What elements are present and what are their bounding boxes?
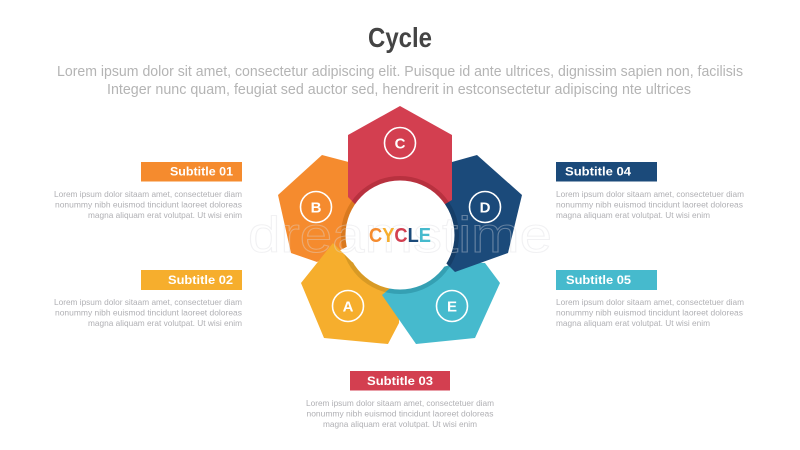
panel: subtitle 01: Lorem ipsum dolor sitaam amet, consectetuer diam: [54, 189, 242, 199]
subtitle text: [57, 63, 743, 98]
segment A: [301, 243, 400, 344]
panel: subtitle 01: Subtitle 01: [170, 166, 234, 178]
panel: subtitle 01: magna aliquam erat volutpat. Ut wisi enim: [88, 210, 242, 220]
cycle diagram: [278, 106, 522, 344]
panel: subtitle 05: Subtitle 05: [566, 275, 632, 287]
panel: subtitle 05: Lorem ipsum dolor sitaam amet, consectetuer diam: [556, 297, 744, 307]
panel: subtitle 01: [54, 162, 242, 220]
panel: subtitle 05: [556, 270, 744, 328]
panel: subtitle 05: nonummy nibh euismod tincidunt laoreet doloreas: [556, 308, 743, 318]
center circle: [346, 180, 454, 290]
segment A: A: [343, 298, 354, 316]
segment C: C: [395, 136, 406, 152]
panel: subtitle 04: nonummy nibh euismod tincidunt laoreet doloreas: [556, 200, 743, 210]
segment D: D: [480, 200, 491, 216]
panel: subtitle 03: Subtitle 03: [367, 376, 433, 388]
panel: subtitle 04: magna aliquam erat volutpat. Ut wisi enim: [556, 210, 710, 220]
panel: subtitle 02: nonummy nibh euismod tincidunt laoreet doloreas: [55, 308, 242, 318]
segment B: [278, 155, 356, 262]
segment B: B: [311, 200, 322, 216]
segment C: [348, 106, 452, 204]
title: Cycle: [368, 22, 432, 53]
panel: subtitle 02: Subtitle 02: [168, 275, 233, 287]
panel: subtitle 03: magna aliquam erat volutpat. Ut wisi enim: [323, 419, 477, 429]
panel: subtitle 02: [54, 270, 242, 328]
panel: subtitle 02: Lorem ipsum dolor sitaam amet, consectetuer diam: [54, 297, 242, 307]
segment E: E: [447, 298, 457, 316]
segment D: [445, 155, 522, 272]
subtitle text: Integer nunc quam, feugiat sed auctor sed, hendrerit in estconsectetur adipiscing nte ultrices: [107, 81, 691, 98]
panel: subtitle 05: magna aliquam erat volutpat. Ut wisi enim: [556, 318, 710, 328]
center label: CYCLE: [369, 225, 431, 247]
panel: subtitle 04: Lorem ipsum dolor sitaam amet, consectetuer diam: [556, 189, 744, 199]
segment E: [382, 262, 500, 344]
panel: subtitle 03: Lorem ipsum dolor sitaam amet, consectetuer diam: [306, 398, 494, 408]
panel: subtitle 04: [556, 162, 744, 220]
watermark: dreamstime: [248, 207, 552, 263]
panel: subtitle 03: nonummy nibh euismod tincidunt laoreet doloreas: [306, 408, 494, 418]
subtitle text: Lorem ipsum dolor sit amet, consectetur adipiscing elit. Puisque id ante ultrices, dignissim sapien non, facilisis: [57, 63, 743, 80]
panel: subtitle 02: magna aliquam erat volutpat. Ut wisi enim: [88, 318, 242, 328]
panel: subtitle 03: [306, 371, 494, 429]
panel: subtitle 01: nonummy nibh euismod tincidunt laoreet doloreas: [55, 200, 242, 210]
panel: subtitle 04: Subtitle 04: [565, 166, 632, 178]
